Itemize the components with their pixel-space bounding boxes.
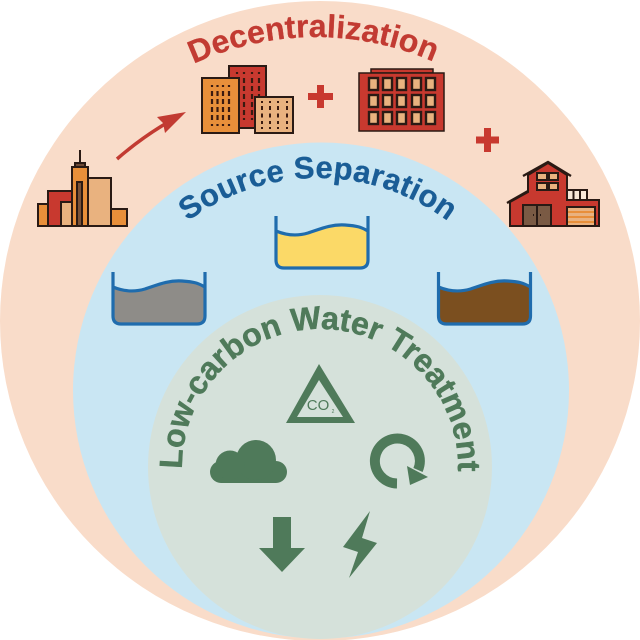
heading: Decentralization: Decentralization bbox=[186, 14, 437, 64]
icon: plus sign two bbox=[476, 128, 499, 152]
icon: yellow water tank bbox=[276, 216, 368, 268]
icon: down arrow bbox=[259, 517, 305, 572]
heading: Source Separation: Source Separation bbox=[179, 156, 454, 220]
panel: low-carbon water treatment circle bbox=[148, 295, 492, 639]
icon: grey water tank bbox=[113, 272, 205, 324]
icon: CO2 triangle: CO bbox=[307, 397, 329, 414]
icon: CO2 triangle bbox=[286, 364, 355, 423]
panel: source separation circle bbox=[73, 142, 569, 638]
icon: apartment buildings bbox=[202, 66, 293, 133]
icon: cloud bbox=[210, 440, 287, 483]
heading: Low-carbon Water Treatment: Low-carbon Water Treatment bbox=[160, 306, 480, 472]
icon: brown water tank bbox=[438, 272, 530, 324]
icon: CO2 triangle: 2 bbox=[332, 409, 335, 415]
icon: office block bbox=[359, 69, 444, 131]
icon: city skyline bbox=[38, 150, 127, 226]
icon: lightning bolt bbox=[343, 511, 377, 578]
icon: plus sign one bbox=[308, 85, 333, 108]
arrow: city to decentralized buildings bbox=[117, 112, 186, 159]
icon: farmhouse bbox=[507, 162, 599, 226]
icon: recycling arrow bbox=[375, 439, 428, 485]
